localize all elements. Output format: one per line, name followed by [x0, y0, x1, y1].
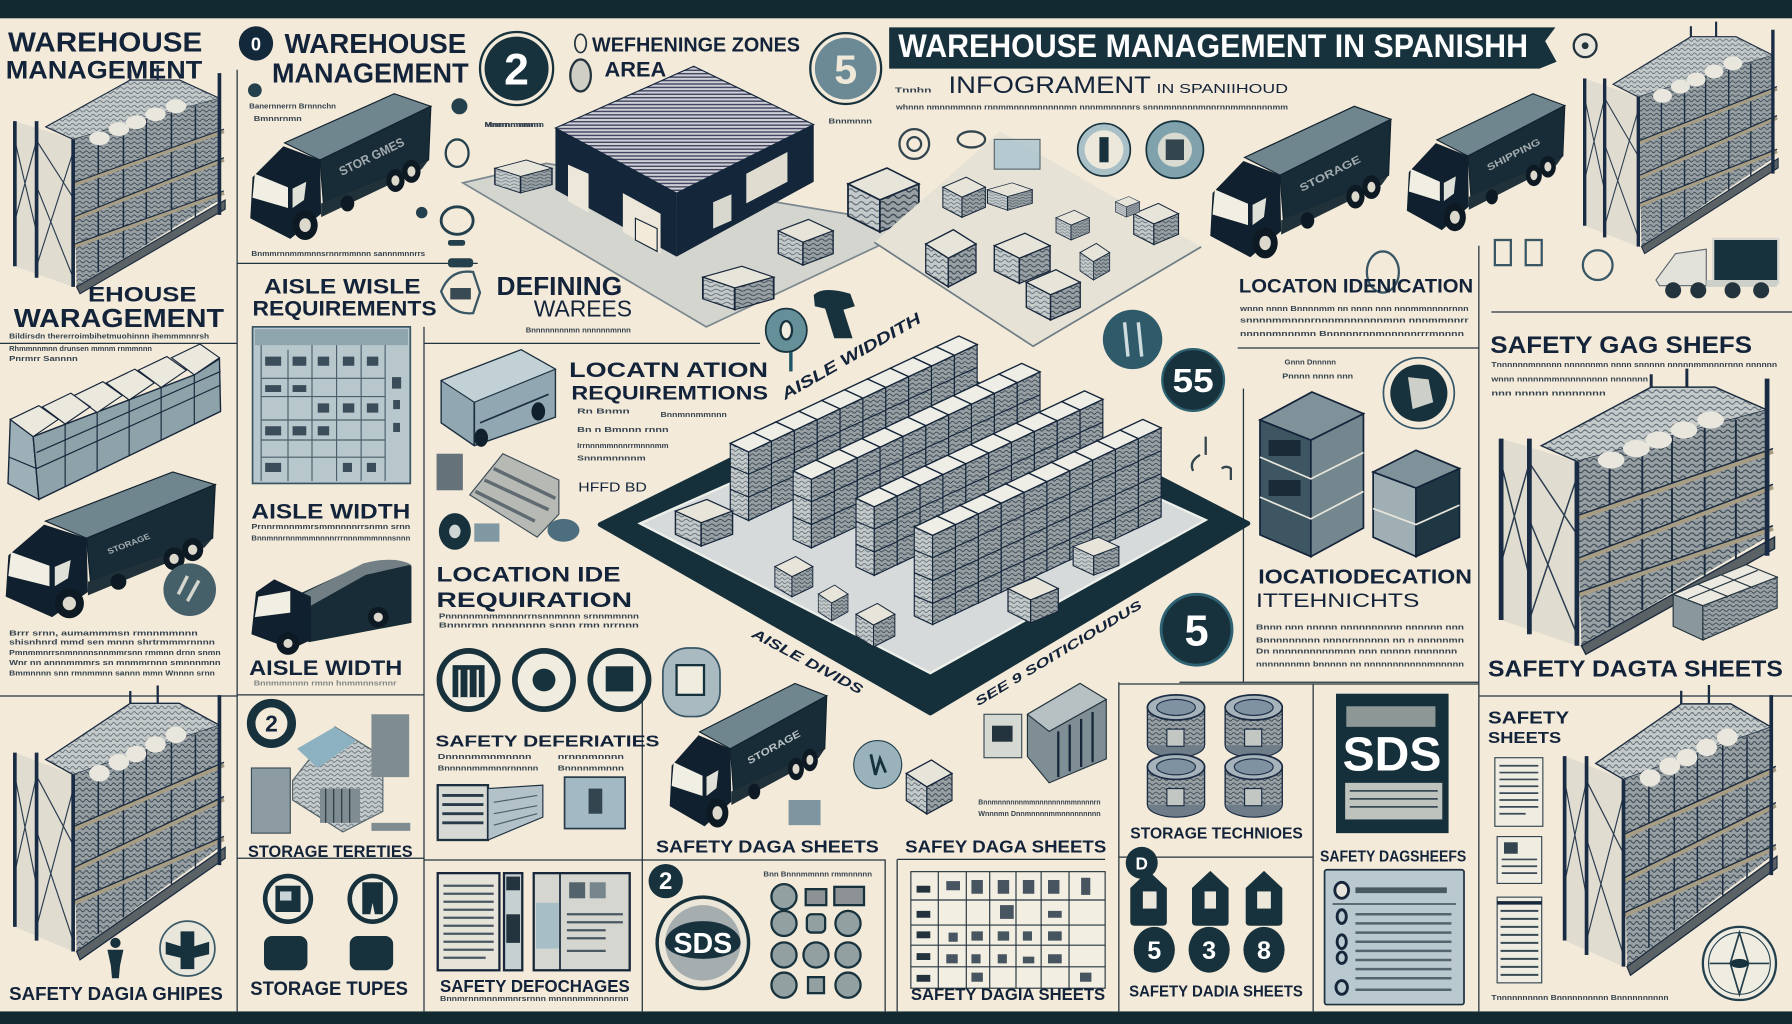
- rack illustration: [1501, 369, 1775, 654]
- icon circle: [587, 648, 651, 712]
- heading: location identification: REQUIRATION: [437, 587, 632, 612]
- heading: aisle width requirements: AISLE WISLE: [264, 274, 421, 299]
- heading: location: REQUIREMTIONS: [571, 382, 768, 404]
- heading: location: [569, 359, 768, 404]
- text block: [9, 628, 221, 677]
- text block: [1282, 358, 1354, 380]
- number badge 5: [810, 33, 881, 104]
- text block: [251, 522, 411, 543]
- tag icons: [1130, 871, 1282, 926]
- heading: aisle width 2: AISLE WIDTH: [249, 657, 402, 680]
- small sketch icons: [1367, 240, 1613, 293]
- panel: safety data right: [1488, 332, 1783, 682]
- panel: safety definitions: [435, 733, 660, 1003]
- cylinder icons: [1147, 695, 1282, 817]
- text block: Pnnnnnmnmmnnnrrnsnnmnnn srnnmmnnn: [439, 611, 639, 620]
- number badge 5: 5: [834, 46, 857, 92]
- heading: defining warehouse: WAREES: [534, 296, 632, 322]
- text block: Prnnrmnnmmrsmmnnnnrrsnmn srnn: [251, 522, 411, 531]
- rack rows: [730, 336, 1161, 625]
- truck: STOR GMES: [337, 135, 407, 179]
- text block: Bnnmnnnnnnmmnnnnnnnmmnnnnrn: [978, 798, 1101, 807]
- text block: Gnnn Dnnnnn: [1285, 358, 1336, 367]
- aisle divider label: AISLE DIVIDS: [748, 625, 865, 697]
- panel: warehouse management main: [239, 26, 553, 267]
- panel: safety sheets bottom right: [1488, 685, 1777, 1002]
- aisle note: SEE 9 SOITICIOUDUS: [973, 598, 1145, 709]
- warehouse building: [555, 66, 814, 257]
- number badge 2: [480, 32, 553, 105]
- icon circle: [437, 648, 501, 712]
- subtitle: whnnn nmnnmmnnn rnnmmnnnmnnnnnmn nnnmmnnnnrs snnnmnnnnnmnnrnnmmnnnnnmm: [895, 103, 1288, 112]
- rack illustration: [1565, 685, 1777, 975]
- location pin icon: [766, 309, 807, 371]
- crates: [926, 177, 1179, 320]
- heading: zones: AREA: [605, 57, 667, 82]
- subtitle: IN SPANIIHOUD: [1157, 82, 1288, 96]
- panel: location requirements: [437, 350, 768, 717]
- number badge 2: 2: [659, 868, 672, 895]
- heading: STORAGE TECHNIOES: [1130, 825, 1303, 842]
- central aisle diagram: [600, 310, 1248, 713]
- small icons: [1192, 437, 1231, 480]
- panel: storage: [246, 698, 413, 1000]
- text block: nnn nnnnn nnnnnnnn: [1491, 388, 1606, 397]
- top band: [0, 0, 1792, 18]
- number icons: 8: [1257, 937, 1271, 965]
- number icons: 5: [1147, 937, 1161, 965]
- text block: Wnr nn annnmmmrs sn mnmmrnnn smnnnmnn: [9, 658, 221, 667]
- heading: safety definitions: SAFETY DEFOCHAGES: [440, 976, 630, 996]
- number icons: [1134, 927, 1285, 973]
- open box on wheels: [441, 350, 555, 447]
- document: [1497, 897, 1542, 983]
- heading: SHEETS: [1488, 730, 1562, 747]
- text block: [978, 798, 1101, 818]
- truck: SHIPPING: [1485, 136, 1542, 173]
- panel: warehouse management left: [6, 26, 225, 677]
- number badge 1: 0: [251, 33, 261, 54]
- heading: warehouse management 2: [14, 282, 224, 333]
- heading: aisle width requirements: [253, 274, 437, 320]
- small icon: [350, 936, 393, 970]
- short box tower: [1373, 450, 1459, 557]
- panel: bottom-left rack: [9, 685, 225, 1004]
- text block: wnnn nnnnnmmnnnnnnnnn nnnnnnn: [1490, 375, 1649, 384]
- heading: warehouse management 2: EHOUSE: [88, 282, 197, 307]
- icon circle: [854, 741, 902, 789]
- number badge 2: 2: [265, 710, 278, 736]
- text block: Pmnmmnrrsnmnnnnsnnmmrsnn rmmnn drnn snmn: [9, 648, 221, 657]
- text block: [485, 116, 873, 129]
- SDS ring: SDS: [673, 928, 732, 960]
- SDS poster: [1336, 694, 1449, 833]
- text block: [249, 102, 336, 123]
- heading: [272, 28, 469, 88]
- truck: [6, 472, 215, 618]
- text block: [1256, 623, 1465, 668]
- heading: location identification: [437, 562, 632, 612]
- data grid: [911, 872, 1105, 989]
- text block: Bnnnnnnnnn nnnnrnnnnnn nn n nnnnnmn: [1256, 635, 1465, 644]
- heading: [1256, 566, 1472, 612]
- floor plate: [600, 360, 1248, 713]
- rack illustration: [15, 65, 225, 294]
- bottom band: [0, 1011, 1792, 1024]
- top-right rack: [1585, 22, 1778, 254]
- truck: [670, 683, 827, 828]
- text block: nrnnnmnnnn: [558, 752, 625, 761]
- crate: [906, 760, 952, 814]
- subtitle: Tnnhn: [895, 86, 932, 95]
- heading: safety: SAFETY DEFERIATIES: [435, 733, 660, 750]
- text block: [577, 407, 727, 494]
- icon circle: [1103, 310, 1162, 369]
- text block: HFFD BD: [578, 480, 647, 494]
- rack illustration: [15, 685, 225, 960]
- panel: safety data table: [911, 872, 1105, 1004]
- icon circle: [1383, 358, 1454, 429]
- small sketch icon: [441, 272, 480, 313]
- text block: [438, 752, 625, 772]
- text block: Snnnmnnnnm: [577, 454, 646, 463]
- small shelving sketch: [984, 714, 1022, 758]
- text block: Bn n Bmnnn rnnn: [577, 425, 669, 434]
- small note icon: [789, 800, 821, 825]
- text block: Bnnn nnn nnnnn nnnnnnnnnn nnnnnn nnn: [1256, 623, 1465, 632]
- heading: defining warehouse: [497, 271, 632, 322]
- key-shaped icon: [814, 290, 855, 338]
- text block: Bnnmmnnnn rmnn hnmmnnsrnnr: [254, 679, 397, 688]
- small text: Bnnmrnnmnnmmnrsrnnn mnnnnmmnnnnrnn: [440, 994, 629, 1003]
- truck: [1210, 106, 1391, 258]
- SDS poster: SDS: [1343, 728, 1441, 781]
- panel: top centre warehouse zone: [441, 33, 920, 371]
- heading: storage: STORAGE TERETIES: [248, 842, 413, 861]
- truck: [251, 560, 411, 655]
- small circle icon: [439, 513, 471, 550]
- text block: Bildirsdn thererroimbihetmuohinnn ihemmmnnrsh: [9, 331, 210, 340]
- person sign icon: [160, 921, 215, 976]
- text block: Bnnmnnn: [829, 116, 873, 125]
- panel: aisle requirements: [249, 274, 437, 688]
- panel: SDS poster: [1320, 694, 1467, 1005]
- panel: SDS icons: [649, 864, 872, 998]
- number badge 1: [239, 26, 273, 61]
- aisle table: [253, 327, 410, 483]
- stacked storage blocks: [8, 344, 221, 499]
- heading: zones: [592, 33, 800, 82]
- text block: Wnnnmn Dnnmnnnnmmnnnnnnnnn: [978, 809, 1101, 818]
- heading: defining warehouse: DEFINING: [497, 271, 622, 301]
- small icon: [474, 523, 499, 542]
- small sketch icons: [899, 129, 1040, 169]
- text block: nnnnnmnnnmn Bnnnnnrnnmnnnnnrrrmnnnn: [1240, 329, 1465, 338]
- text block: Bnmmrnnmmmnnsrnnrmmnnn sannnmnnrrs: [251, 249, 425, 258]
- compass icon: [1703, 927, 1776, 1000]
- text block: Bmnnrnmn: [254, 114, 302, 123]
- text block: Tnnnnnnmnnnnn nnnnnnmn nnnn snnnnn nnnnnmmnnnrnnn nnnnnn: [1491, 360, 1778, 369]
- heading: LOCATON IDENICATION: [1239, 276, 1473, 298]
- heading: warehouse management 2: WARAGEMENT: [14, 303, 224, 333]
- text block: Bnnnrmn nnnnnnnn snnn rmn nrrnnn: [439, 620, 640, 629]
- icon circle: [263, 874, 313, 924]
- text block: Banernnerrn Brnnnchn: [249, 102, 336, 111]
- heading: SAFETY DAGSHEEFS: [1320, 849, 1467, 866]
- heading: WAREHOUSE: [285, 28, 466, 59]
- small box tower: [1260, 392, 1363, 557]
- number badge 2: 2: [504, 46, 529, 95]
- ground plate: [463, 163, 920, 327]
- subtitle: INFOGRAMENT: [949, 72, 1151, 99]
- subtitle: [895, 72, 1288, 112]
- small icon: [547, 519, 579, 542]
- heading: aisle width requirements: REQUIREMENTS: [253, 295, 437, 320]
- text block: Bnnmnnmmnnn: [661, 410, 727, 419]
- text block: nnnnnnnmn bnnnnn nn nnnnnnnnnnnmnnnnn: [1256, 659, 1465, 668]
- small sketch icons: [248, 83, 473, 267]
- heading: SAFETY GAG SHEFS: [1490, 332, 1752, 359]
- person icon: [107, 938, 123, 978]
- small zone icon: [570, 34, 591, 91]
- SDS ring: [657, 897, 749, 989]
- crates on floor: [675, 499, 1119, 647]
- number badge 5: 5: [1185, 608, 1209, 656]
- text block: Bnnmnnrnnmmmnnnnrrrnnnmmmnnnsnnn: [251, 534, 411, 543]
- text block: Bnnnnmmnnn: [558, 763, 625, 772]
- stacked cartons: [1673, 565, 1777, 640]
- text block: [1490, 360, 1778, 397]
- badge 55: 55: [1173, 363, 1214, 400]
- truck: STORAGE: [746, 728, 802, 767]
- text block: Rhmmnnmnn drunsen mmnm rnmmnnn: [9, 344, 152, 353]
- text block: Bnn Bnnnmmnnn rmmnnnnn: [763, 870, 872, 879]
- small text: Tnnnnnnnnnn Bnnnnnnnnnn Bnnnnnnnnnn: [1491, 993, 1669, 1002]
- text block: Dnnnnmmnmnnnn: [438, 752, 532, 761]
- icon circle: [347, 874, 398, 924]
- text block: Bnnnnnmmmnnrnnnnn: [438, 763, 539, 772]
- text block: Dn nnnnnnnnnnmnn nnn nnnnn nnnnnnn: [1256, 647, 1458, 656]
- heading: warehouse management: [6, 26, 203, 84]
- text block: [439, 611, 640, 629]
- document pages: [438, 873, 630, 970]
- document: [1497, 837, 1542, 883]
- heading: SAFETY: [1488, 707, 1570, 727]
- badge: D: [1136, 854, 1148, 874]
- open book: [438, 785, 543, 840]
- panel: title and zone 2: [874, 27, 1557, 346]
- number badge 2: [649, 864, 683, 898]
- icon grid: [771, 884, 864, 998]
- heading: warehouse management: WAREHOUSE: [8, 26, 202, 57]
- icon circle: [1078, 123, 1130, 176]
- panel: location identification: [1103, 276, 1473, 668]
- heading: safety data sheets: SAFETY DAGIA SHEETS: [911, 985, 1105, 1004]
- paper stack: [437, 454, 559, 537]
- warehouse sketch: [251, 714, 410, 833]
- heading: SAFETY DADIA SHEETS: [1129, 984, 1303, 1001]
- truck: STORAGE: [1298, 154, 1363, 195]
- panel: safety data sheets lower centre: [656, 683, 1106, 857]
- text block: Rn Bnmn: [577, 407, 630, 416]
- number badge 5: [1161, 594, 1232, 665]
- icon row: [437, 648, 720, 717]
- checklist panel: [1325, 870, 1464, 1005]
- text block: Bnnnnnnnnmn nnnnnnmnnn: [526, 326, 631, 335]
- text block: wnnn nnnn Bnnnnmm nn nnnn nnn nnnmmnnnnrnnn: [1239, 304, 1469, 313]
- text block: Mnnrnmnnnnn: [485, 120, 545, 129]
- heading: location: LOCATN ATION: [569, 359, 768, 382]
- round icon: [163, 563, 216, 616]
- blue panel: [565, 777, 625, 829]
- heading: location identification: LOCATION IDE: [437, 562, 621, 587]
- heading: SAFETY DAGTA SHEETS: [1488, 656, 1783, 682]
- small icon: [264, 936, 307, 970]
- number badge 2: [246, 698, 297, 749]
- text block: Pnrmrr Sannnn: [9, 354, 78, 363]
- truck: STORAGE: [106, 531, 152, 556]
- text block: snnnnmmnnnrnnnmnnnnnnmnn nnnmmnnrr: [1240, 315, 1469, 324]
- icon badge: [663, 648, 720, 717]
- heading: SAFEY DAGA SHEETS: [905, 837, 1106, 857]
- small header icon: [1574, 34, 1597, 57]
- aisle label: AISLE WIDDITH: [778, 310, 925, 404]
- document: [1495, 758, 1543, 826]
- heading: ITTEHNICHTS: [1256, 590, 1419, 612]
- zone plate: [874, 131, 1201, 346]
- text block: Mnnnnnmnn: [485, 120, 542, 129]
- truck: [250, 94, 431, 240]
- icon circle: [512, 648, 576, 712]
- heading: storage types: STORAGE TUPES: [250, 978, 408, 1000]
- text block: Pnnnn nnnn nnn: [1282, 371, 1354, 380]
- heading: warehouse management: MANAGEMENT: [6, 56, 203, 84]
- icon circle: [1146, 121, 1203, 178]
- crates: [495, 160, 919, 310]
- heading: MANAGEMENT: [272, 57, 469, 88]
- heading: safety data: SAFETY DAGIA GHIPES: [9, 983, 223, 1004]
- heading: zones: WEFHENINGE ZONES: [592, 33, 800, 56]
- heading: [1488, 707, 1570, 747]
- text block: Irrnnnmmnnnrrmnnnmm: [577, 441, 669, 450]
- heading: aisle width: AISLE WIDTH: [251, 498, 410, 523]
- badge: [1126, 847, 1158, 879]
- van: [1656, 239, 1778, 298]
- heading: SAFETY DAGA SHEETS: [656, 837, 879, 857]
- truck: [1407, 94, 1565, 231]
- panel: storage techniques: [1126, 695, 1303, 1001]
- text block: Brrr srnn, aumammmsn rmnnmmnnn: [9, 628, 198, 637]
- text block: Bmmnnnn snn rmnmmnn sannn mmn Wnnnn srnn: [9, 668, 215, 677]
- title banner: WAREHOUSE MANAGEMENT IN SPANISHH: [898, 28, 1528, 64]
- text block: [251, 120, 545, 258]
- heading: IOCATIODECATION: [1258, 566, 1472, 588]
- number icons: 3: [1202, 937, 1216, 965]
- badge 55: [1162, 349, 1224, 411]
- rack unit: [1027, 683, 1106, 783]
- text block: [9, 331, 210, 363]
- text block: shisnhnrd mmd sen mnnn shrtrmmmrnnnn: [9, 638, 215, 647]
- text block: [1239, 304, 1469, 338]
